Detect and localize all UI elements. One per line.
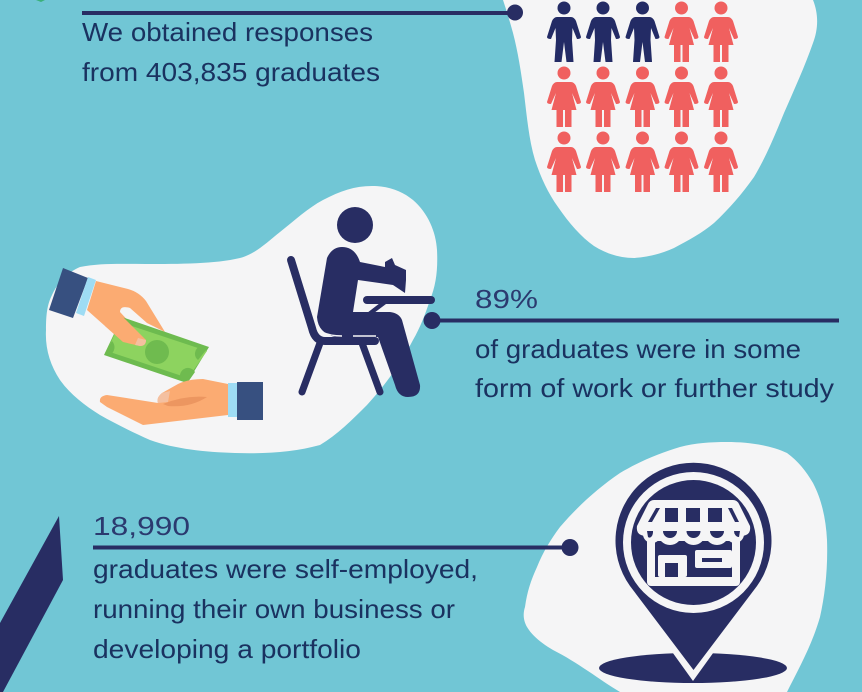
upper hand	[87, 281, 165, 346]
section: self-employed	[93, 511, 578, 664]
awning	[637, 500, 750, 537]
text: responses: from 403,835 graduates	[82, 57, 380, 87]
lower hand	[100, 379, 228, 425]
window	[695, 550, 732, 568]
thumb over banknote	[105, 314, 146, 346]
text: work or further study: of graduates were in some	[475, 334, 801, 364]
head	[337, 207, 373, 243]
text: responses: We obtained responses	[82, 17, 373, 47]
statistic: 89%: 89%	[475, 284, 538, 314]
illustration: hands exchanging money	[49, 268, 263, 425]
connector line: responses	[82, 4, 523, 20]
banknote	[104, 317, 209, 383]
door	[658, 555, 687, 577]
blob: middle panel	[46, 186, 437, 453]
lower sleeve	[237, 382, 263, 420]
blob: bottom right panel	[524, 442, 827, 692]
lower cuff	[228, 383, 237, 417]
decorative green fragment	[36, 0, 45, 2]
pin	[616, 463, 771, 670]
text: self-employed graduates: developing a portfolio	[93, 634, 361, 664]
gap lines between body and seat	[322, 332, 376, 336]
shop body	[647, 536, 740, 586]
icon: shop location pin	[599, 463, 787, 683]
upper cuff	[76, 277, 96, 316]
text: self-employed graduates: graduates were self-employed,	[93, 554, 478, 584]
section: responses	[82, 4, 523, 87]
shop	[637, 500, 750, 586]
desk	[367, 296, 431, 304]
pictogram: people grid, 3 men and 12 women	[547, 2, 738, 192]
connector line: 89 percent	[424, 312, 839, 329]
text: work or further study	[475, 334, 834, 403]
text: self-employed graduates	[93, 554, 478, 664]
connector line: self-employed	[93, 539, 578, 556]
icon: student seated at desk	[291, 207, 431, 397]
text: self-employed graduates: running their own business or	[93, 594, 455, 624]
blob: top right panel	[503, 0, 817, 258]
text: work or further study: form of work or further study	[475, 373, 834, 403]
upper sleeve	[49, 268, 88, 318]
statistic: 18,990: 18,990	[93, 511, 190, 541]
pin shadow	[599, 653, 787, 683]
chair	[291, 260, 380, 392]
text: responses	[82, 17, 380, 87]
section: 89 percent	[424, 284, 839, 403]
body	[317, 247, 420, 397]
decorative navy arrow shape	[0, 516, 63, 692]
